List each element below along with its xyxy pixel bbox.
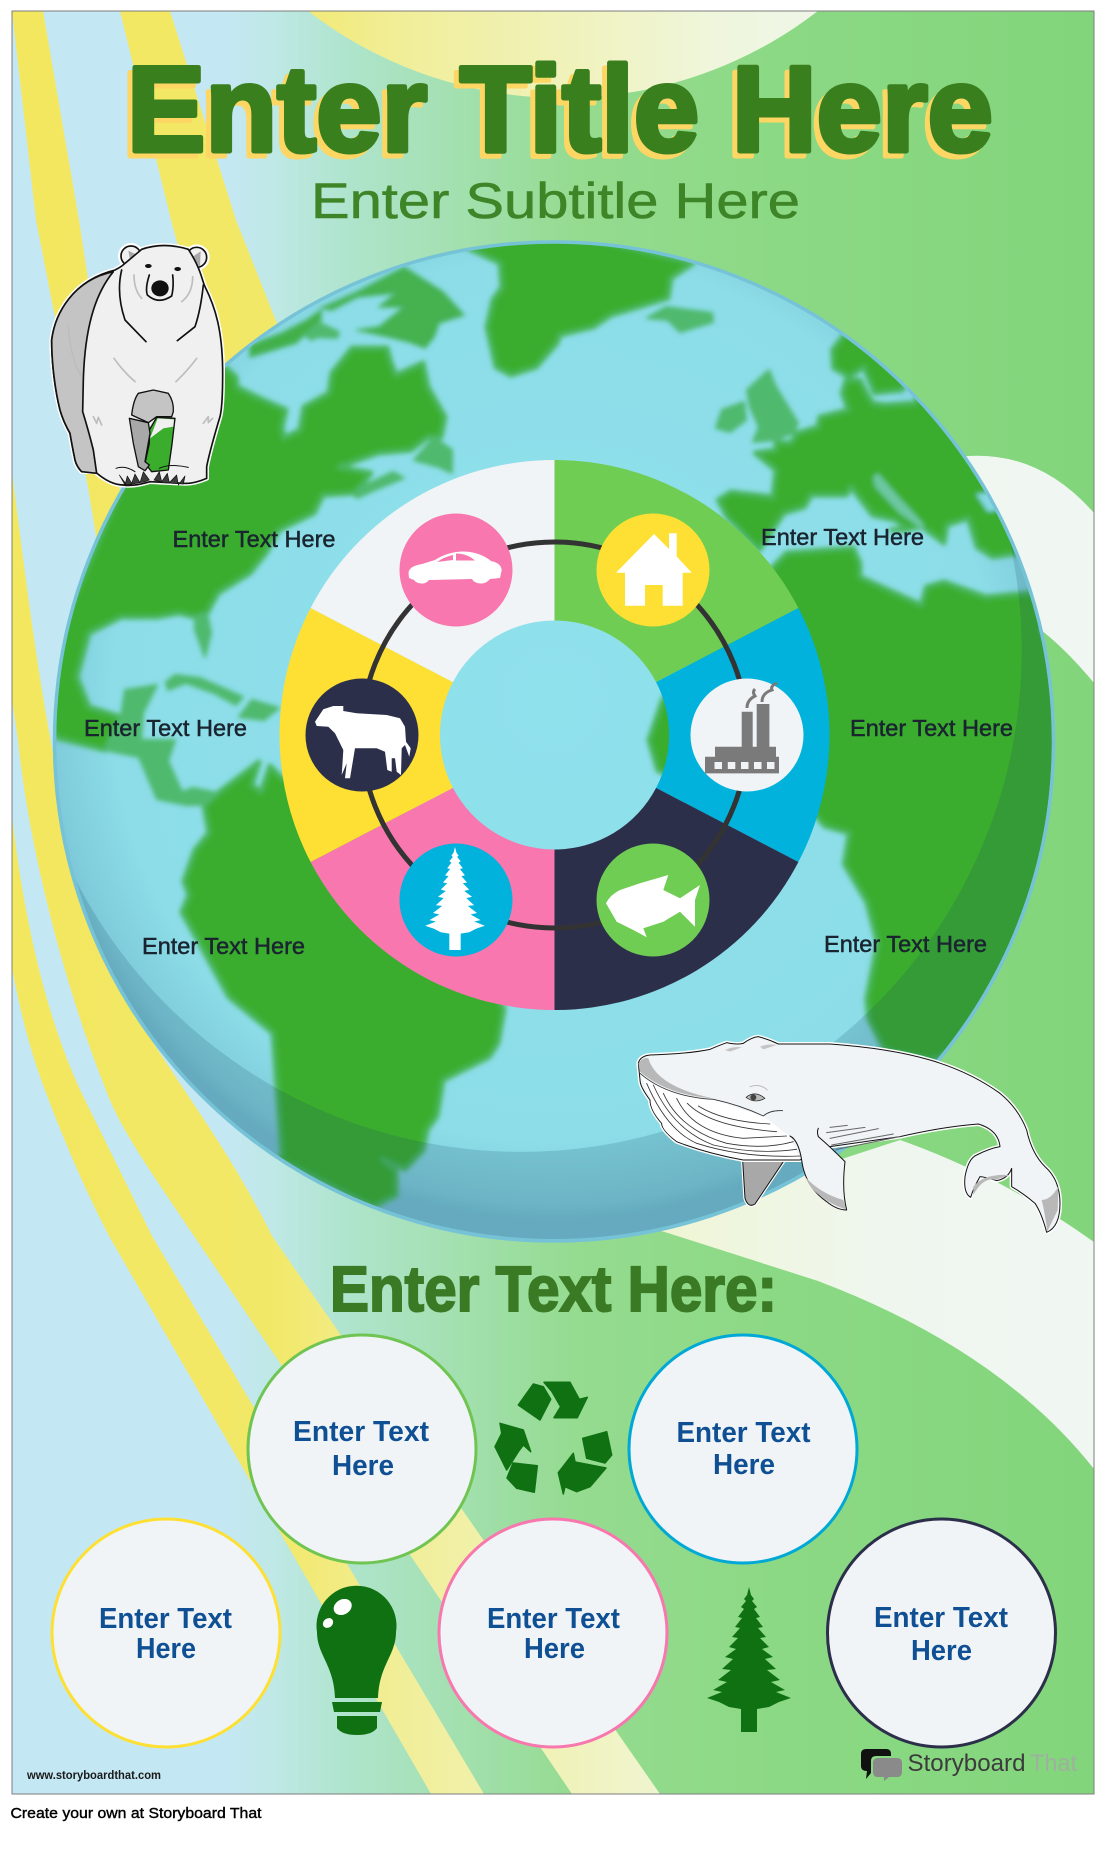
segment: yellow <box>280 608 453 862</box>
whale eye <box>746 1094 765 1101</box>
website url: www.storyboardthat.com <box>26 1768 161 1782</box>
inland seas <box>972 488 1042 644</box>
bear ears <box>120 245 207 268</box>
text circle: blue: Here <box>713 1449 775 1481</box>
label: middle left: Enter Text Here <box>84 715 247 741</box>
storyboard that logo <box>861 1749 1077 1781</box>
label: lower left: Enter Text Here <box>142 933 305 959</box>
adriatic sea <box>873 473 923 530</box>
icon: recycle symbol <box>495 1382 612 1494</box>
illustration: polar bear <box>52 245 223 485</box>
bear flank shading <box>52 272 113 473</box>
icon: factory <box>690 678 804 792</box>
bear head lines <box>119 270 203 342</box>
globe <box>49 240 1062 1243</box>
label: upper left: Enter Text Here <box>172 526 336 552</box>
storyboard that logo: That <box>1030 1750 1077 1777</box>
title: Enter Title Here <box>127 41 993 177</box>
text circle: navy <box>828 1519 1056 1747</box>
illustration: whale <box>638 1037 1060 1232</box>
text circle: blue <box>629 1335 857 1563</box>
label: middle right: Enter Text Here <box>850 715 1013 741</box>
text circle: pink <box>439 1519 667 1747</box>
label: upper right: Enter Text Here <box>761 524 924 550</box>
label: lower right: Enter Text Here <box>824 931 987 957</box>
bear ear shading <box>128 251 201 267</box>
text circle: yellow: Here <box>136 1633 196 1665</box>
icon: fish <box>596 844 710 956</box>
whale flank lines <box>827 1125 900 1149</box>
whale flipper and fluke shading <box>805 1175 1058 1231</box>
donut ring chart <box>280 460 829 1010</box>
globe rim <box>54 242 1054 1241</box>
subtitle: Enter Subtitle Here <box>311 173 800 229</box>
bear nose and eyes <box>145 264 181 296</box>
text circle: green: Enter Text <box>293 1416 429 1448</box>
whale blowhole shading <box>725 1044 777 1052</box>
text circle: green <box>248 1335 476 1563</box>
text circle: yellow <box>52 1519 280 1747</box>
whale body <box>638 1037 1060 1232</box>
text circle: yellow: Enter Text <box>99 1603 232 1635</box>
globe lower shadow crescent <box>76 542 1052 1239</box>
text circle: navy: Enter Text <box>874 1602 1008 1634</box>
icon: house <box>596 514 710 626</box>
text circle: blue: Enter Text <box>676 1417 811 1449</box>
storyboard that logo: Storyboard <box>908 1750 1026 1777</box>
text circle: pink: Here <box>524 1633 585 1665</box>
globe continents <box>30 230 1088 1207</box>
segment: navy <box>554 788 798 1010</box>
section heading: Enter Text Here: <box>330 1253 777 1325</box>
connecting ring line <box>362 542 748 928</box>
bear rear leg <box>129 418 150 471</box>
footer caption: Create your own at Storyboard That <box>10 1805 262 1822</box>
text circle: green: Here <box>332 1450 394 1482</box>
text circle: navy: Here <box>911 1635 972 1667</box>
globe ocean <box>53 240 1055 1242</box>
icon: car <box>400 514 512 626</box>
ring labels <box>84 524 1013 959</box>
title: Enter Title Here <box>122 46 988 182</box>
icon: tree <box>400 844 512 956</box>
gap upper sky <box>150 418 174 438</box>
icon: cow <box>306 678 418 792</box>
segment: green <box>554 460 798 682</box>
bear body outline <box>52 245 223 485</box>
text circle: pink: Enter Text <box>487 1603 620 1635</box>
gap between legs <box>145 417 175 472</box>
whale lip shading <box>638 1058 713 1098</box>
bear fur marks <box>68 275 213 425</box>
segment: pink <box>311 788 554 1010</box>
bear claws <box>119 472 185 485</box>
segment: blue <box>656 608 829 862</box>
bear body <box>52 245 223 485</box>
whale back fin <box>743 1161 784 1205</box>
arctic islands and coastal islands <box>105 267 798 805</box>
icon: light bulb <box>316 1586 396 1735</box>
whale mouth and grooves <box>640 1073 800 1159</box>
bear belly shading <box>132 390 173 423</box>
whale flipper <box>790 1128 847 1210</box>
icon: pine tree <box>707 1587 791 1732</box>
bear ear fill <box>121 246 207 267</box>
segment: white <box>311 460 554 682</box>
